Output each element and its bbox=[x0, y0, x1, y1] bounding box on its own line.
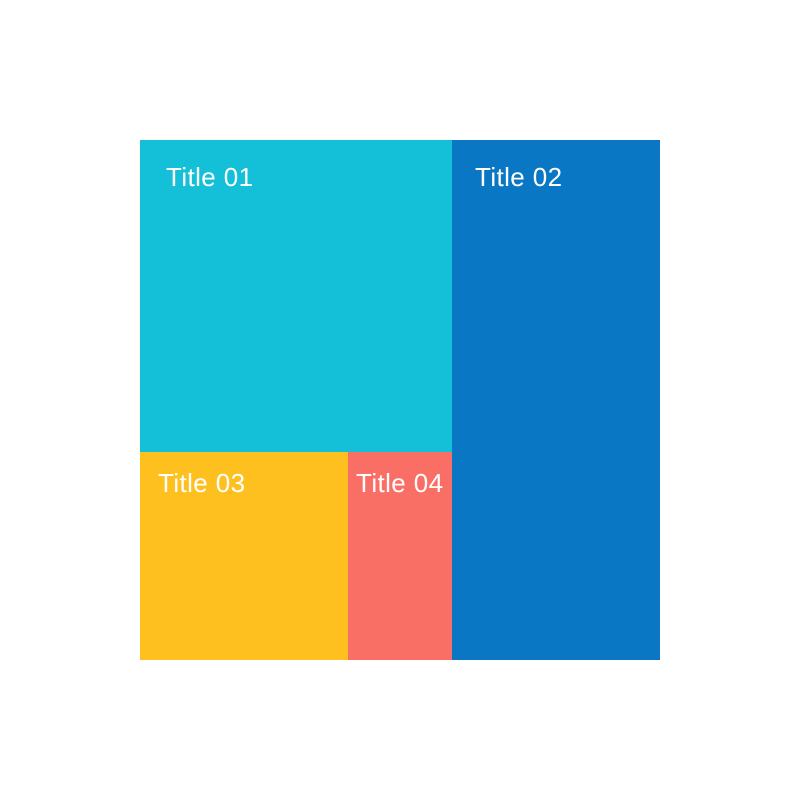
heading: Title 03: Title 03 bbox=[158, 468, 246, 498]
panel: title 04 bbox=[348, 452, 452, 660]
heading: Title 04: Title 04 bbox=[356, 468, 444, 498]
panel: title 03 bbox=[140, 452, 348, 660]
heading: Title 01: Title 01 bbox=[166, 162, 254, 192]
heading: Title 02: Title 02 bbox=[475, 162, 562, 192]
panel: title 01 bbox=[140, 140, 452, 452]
treemap chart bbox=[140, 140, 660, 660]
panel: title 02 bbox=[452, 140, 660, 660]
